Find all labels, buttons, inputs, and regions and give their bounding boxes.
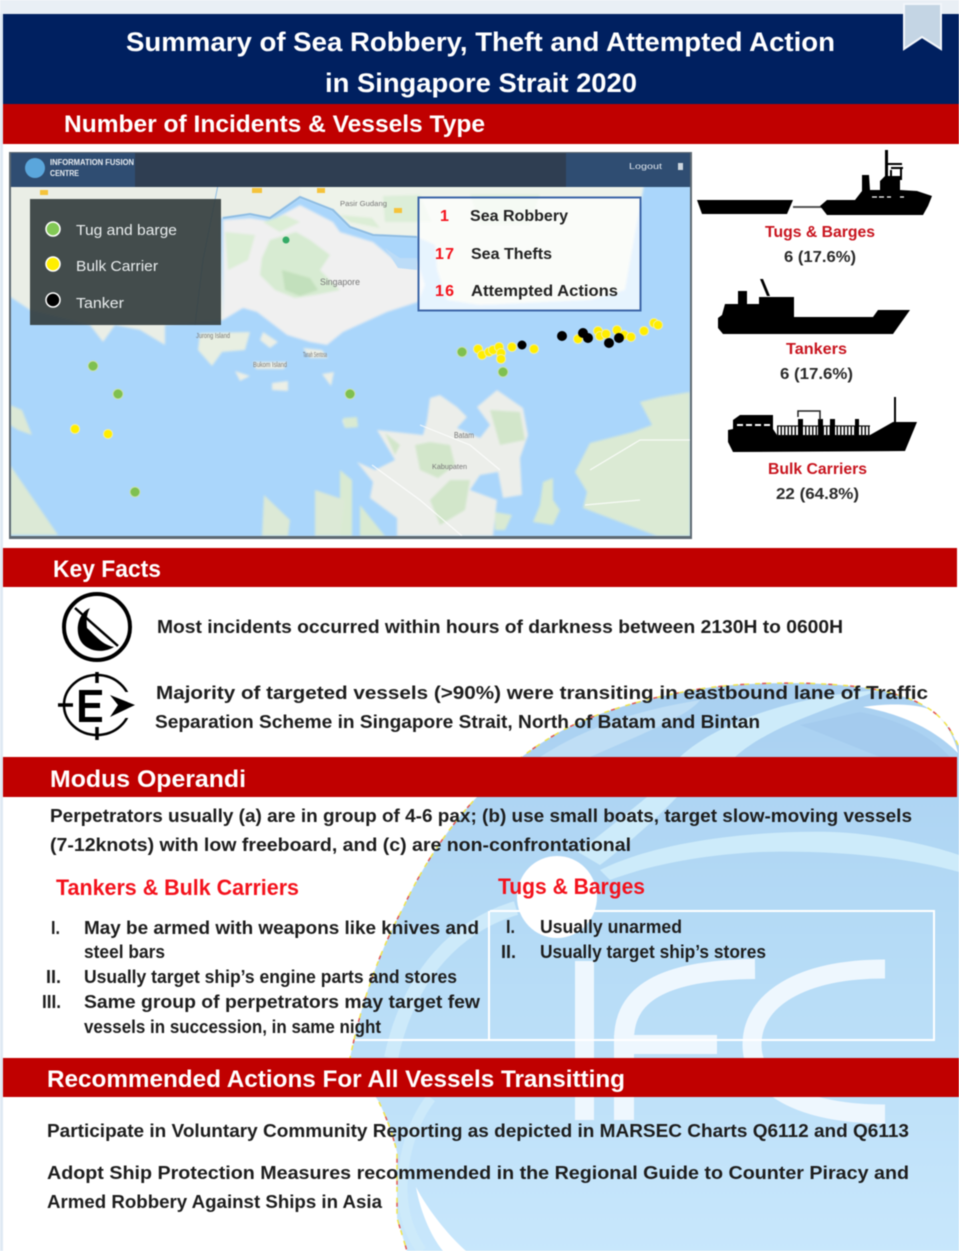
text: eastbound fact: Separation Scheme in Singapore Strait, North of Batam and Bintan [155,712,760,732]
title: Summary of Sea Robbery, Theft and Attempted Action [126,27,835,57]
section heading: number of incidents [3,104,959,144]
map header bar [11,153,690,187]
section heading: modus operandi [3,757,957,797]
list: tankers and bulk carriers: Usually target ship’s engine parts and stores [84,967,457,987]
callout: incident counts: Sea Thefts [471,246,552,263]
list: tankers and bulk carriers: II. [46,967,61,987]
list: tankers and bulk carriers: III. [42,992,61,1012]
map header bar: Logout [629,162,663,171]
section heading: recommended actions [3,1058,959,1097]
label: tugs and barges: Tugs & Barges [765,224,875,241]
icon: moon / darkness [64,594,130,660]
section heading: recommended actions: Recommended Actions For All Vessels Transitting [47,1066,625,1093]
list: tugs and barges: Usually target ship’s stores [540,942,766,962]
section heading: key facts: Key Facts [53,556,161,583]
text: darkness fact: Most incidents occurred within hours of darkness between 2130H to 0600H [157,617,843,637]
text: recommended actions: Adopt Ship Protection Measures recommended in the Regional Guide to Counter Piracy and [47,1163,909,1183]
label: tankers: Tankers [786,341,847,358]
map header bar: INFORMATION FUSION [50,158,134,167]
map markers: tug and barge [88,347,508,497]
list: tankers and bulk carriers: steel bars [84,942,165,962]
text: recommended actions: Participate in Voluntary Community Reporting as depicted in MARSEC Charts Q6112 and Q6113 [47,1121,909,1141]
map markers: tanker [518,328,624,350]
label: tankers: 6 (17.6%) [780,366,853,383]
legend: vessel type: Tanker [76,295,124,312]
text: modus operandi summary: (7-12knots) with low freeboard, and (c) are non-confrontational [50,835,631,855]
title [126,27,835,98]
icon: tanker [718,279,910,334]
list: tugs and barges: I. [506,917,515,937]
section heading: modus operandi: Modus Operandi [50,766,246,793]
label: tugs and barges: 6 (17.6%) [784,249,856,266]
map markers: bulk carrier [70,318,662,438]
list: tankers and bulk carriers [42,918,481,1037]
icon: eastbound compass [58,672,136,740]
callout: incident counts: 16 [435,283,454,300]
list: tugs and barges: II. [501,942,516,962]
text: eastbound fact [155,683,928,732]
list: tugs and barges: Usually unarmed [540,917,682,937]
icon: bookmark [904,4,941,49]
map base: Batam [454,431,474,440]
map base [0,180,690,536]
section heading: key facts [3,548,957,587]
heading: tankers and bulk carriers: Tankers & Bulk Carriers [56,875,299,900]
title banner [3,14,959,104]
text: recommended actions [47,1121,909,1212]
callout: incident counts: 1 [440,208,449,225]
map panel [0,152,692,539]
label: bulk carriers: 22 (64.8%) [776,486,859,503]
text: modus operandi summary [50,806,912,855]
background: IFC globe watermark [350,683,959,1251]
callout: incident counts: 17 [435,246,454,263]
list: tugs and barges [501,917,766,962]
list: tankers and bulk carriers: vessels in succession, in same night [84,1017,381,1037]
list: tankers and bulk carriers: Same group of perpetrators may target few [84,992,481,1012]
legend: vessel type: Tug and barge [76,222,177,239]
text: modus operandi summary: Perpetrators usually (a) are in group of 4-6 pax; (b) use small boats, target slow-moving vessels [50,806,912,826]
legend: vessel type: Bulk Carrier [76,258,158,275]
map base: Jurong Island [196,333,230,340]
list: tankers and bulk carriers: May be armed with weapons like knives and [84,918,479,938]
label: tugs and barges [765,224,875,266]
callout: incident counts [418,198,640,310]
map header bar: CENTRE [50,169,80,178]
heading: tugs and barges: Tugs & Barges [498,874,645,899]
callout: incident counts: Sea Robbery [470,208,568,225]
map base: Singapore [320,277,360,287]
list: tankers and bulk carriers: I. [51,918,60,938]
legend: vessel type [30,199,221,325]
vessel stats column [697,150,932,503]
icon: tug and barge [697,150,932,215]
text: recommended actions: Armed Robbery Against Ships in Asia [47,1192,383,1212]
map base: Bukom Island [253,362,287,369]
label: tankers [780,341,853,383]
label: bulk carriers [768,461,867,503]
text: eastbound fact: Majority of targeted vessels (>90%) were transiting in eastbound lane of Traffic [156,683,928,703]
map base: Pasir Gudang [340,201,387,208]
map base: Tanah Sentosa [303,352,327,359]
callout: incident counts: Attempted Actions [471,283,618,300]
map base: Kabupaten [432,464,467,471]
icon: bulk carrier [728,397,917,452]
section heading: number of incidents: Number of Incidents & Vessels Type [64,111,485,138]
title: in Singapore Strait 2020 [325,68,637,98]
label: bulk carriers: Bulk Carriers [768,461,867,478]
